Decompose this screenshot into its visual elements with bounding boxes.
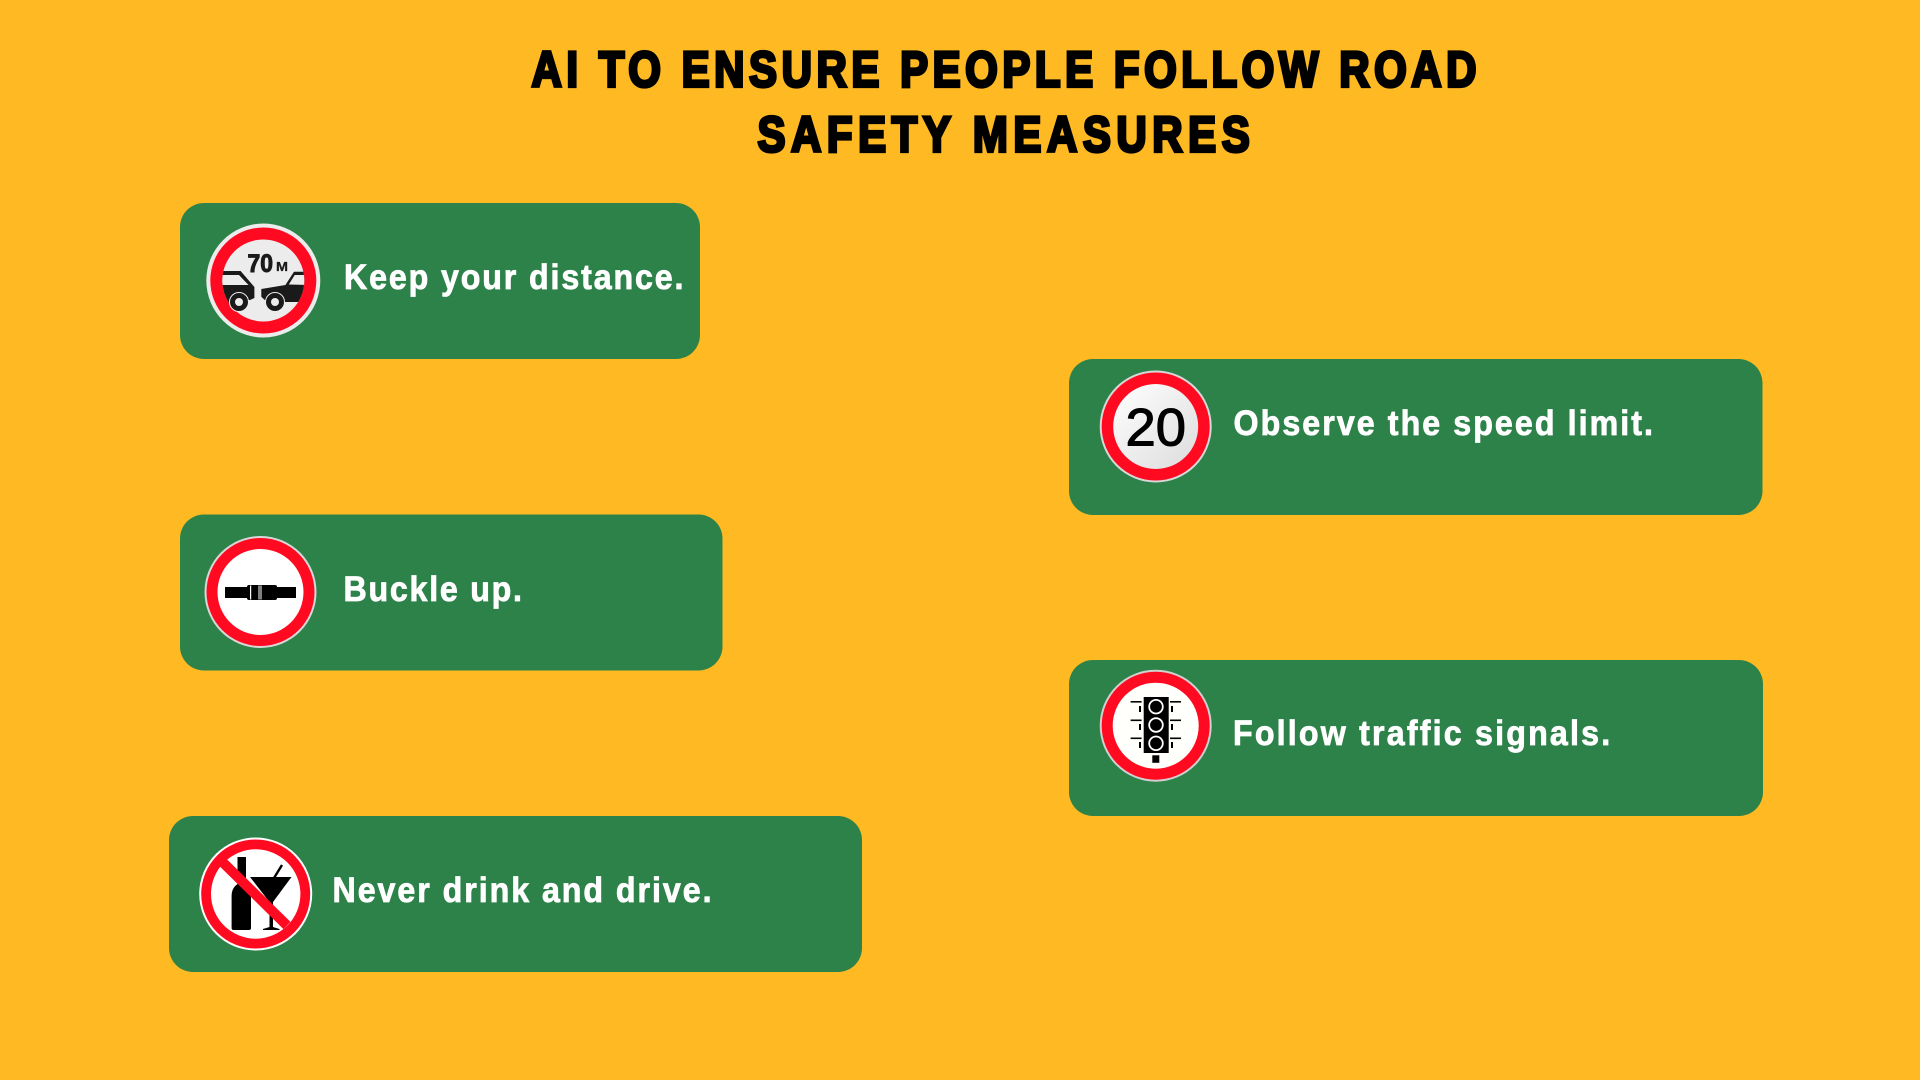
panel: observe the speed limit	[1069, 359, 1762, 515]
title: AI TO ENSURE PEOPLE FOLLOW ROAD	[532, 41, 1477, 97]
label: Never drink and drive.	[332, 872, 712, 910]
label: Follow traffic signals.	[1233, 715, 1610, 753]
icon: no alcohol sign	[199, 838, 312, 950]
icon: distance sign with two cars	[206, 224, 320, 338]
panel: never drink and drive	[169, 816, 862, 972]
label: Keep your distance.	[344, 259, 683, 297]
icon: distance sign with two cars: M	[276, 259, 288, 274]
panel: keep your distance	[180, 203, 700, 359]
panel: buckle up	[180, 514, 722, 670]
title: SAFETY MEASURES	[758, 106, 1250, 162]
icon: speed limit 20 sign: 20	[1126, 398, 1186, 458]
label: Buckle up.	[344, 571, 522, 609]
icon: distance sign with two cars: 70	[248, 250, 273, 278]
icon: seat belt sign	[204, 536, 316, 648]
panel: follow traffic signals	[1069, 660, 1763, 816]
icon: traffic light sign	[1100, 670, 1212, 782]
label: Observe the speed limit.	[1234, 405, 1653, 443]
icon: speed limit 20 sign	[1100, 370, 1212, 482]
title	[532, 41, 1476, 162]
